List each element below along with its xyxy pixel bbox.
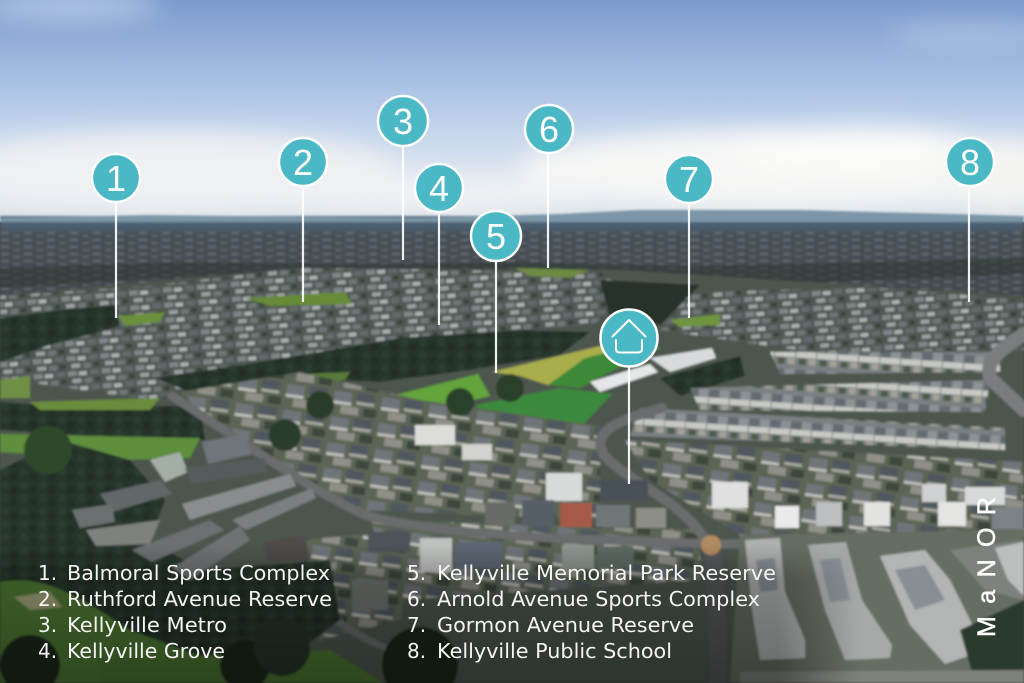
location list right column: 6. xyxy=(407,587,426,611)
location list left column: Balmoral Sports Complex xyxy=(67,561,330,585)
location list right column: Kellyville Memorial Park Reserve xyxy=(437,561,776,585)
apartment blocks lower left xyxy=(72,434,316,580)
location list left column: 2. xyxy=(38,587,57,611)
pin 7 xyxy=(665,155,713,318)
roundabout xyxy=(701,535,721,555)
pin 2: 2 xyxy=(293,142,313,183)
lower left trees and golf course xyxy=(0,374,524,683)
icon: house xyxy=(612,320,646,352)
location list right column: 5. xyxy=(407,561,426,585)
near housing left and centre xyxy=(180,372,700,640)
location list right column: 8. xyxy=(407,639,426,663)
location list right column: 7. xyxy=(407,613,426,637)
pin 8 xyxy=(946,138,994,302)
pin 3 xyxy=(378,96,428,260)
townhouses lower right xyxy=(730,530,1024,683)
distant suburbs xyxy=(0,210,1024,326)
pin 5: 5 xyxy=(486,216,506,257)
logo: Manor: MaNOR xyxy=(973,497,1001,637)
pin 4 xyxy=(415,164,463,325)
pin 8: 8 xyxy=(960,142,980,183)
pin 2 xyxy=(279,138,327,302)
location list right column: Kellyville Public School xyxy=(437,639,672,663)
housing rows right xyxy=(625,352,1024,535)
location list left column: Ruthford Avenue Reserve xyxy=(67,587,332,611)
location list left column: Kellyville Metro xyxy=(67,613,227,637)
clouds xyxy=(0,128,1024,213)
bottom shading behind list xyxy=(0,550,849,683)
foreground houses xyxy=(352,425,1024,610)
location list left column: Kellyville Grove xyxy=(67,639,225,663)
location list left column: 1. xyxy=(38,561,57,585)
roads xyxy=(172,334,1024,683)
sports fields xyxy=(384,342,716,434)
home pin xyxy=(600,310,658,484)
pin 3: 3 xyxy=(393,101,413,142)
pin 6 xyxy=(525,105,573,268)
location list left column xyxy=(38,561,332,663)
pin 1 xyxy=(92,154,140,318)
middle suburbs xyxy=(0,268,1024,400)
pin 4: 4 xyxy=(429,168,449,209)
landscape xyxy=(0,210,1024,683)
base ground xyxy=(0,268,1024,683)
location list left column: 3. xyxy=(38,613,57,637)
location list right column: Arnold Avenue Sports Complex xyxy=(437,587,760,611)
tree bands xyxy=(0,305,745,460)
sky xyxy=(0,0,1024,222)
pin 7: 7 xyxy=(679,159,699,200)
location list left column: 4. xyxy=(38,639,57,663)
location list right column xyxy=(407,561,776,663)
location list right column: Gormon Avenue Reserve xyxy=(437,613,694,637)
pin 5 xyxy=(471,211,521,373)
pin 6: 6 xyxy=(539,109,559,150)
pin 1: 1 xyxy=(106,158,126,199)
